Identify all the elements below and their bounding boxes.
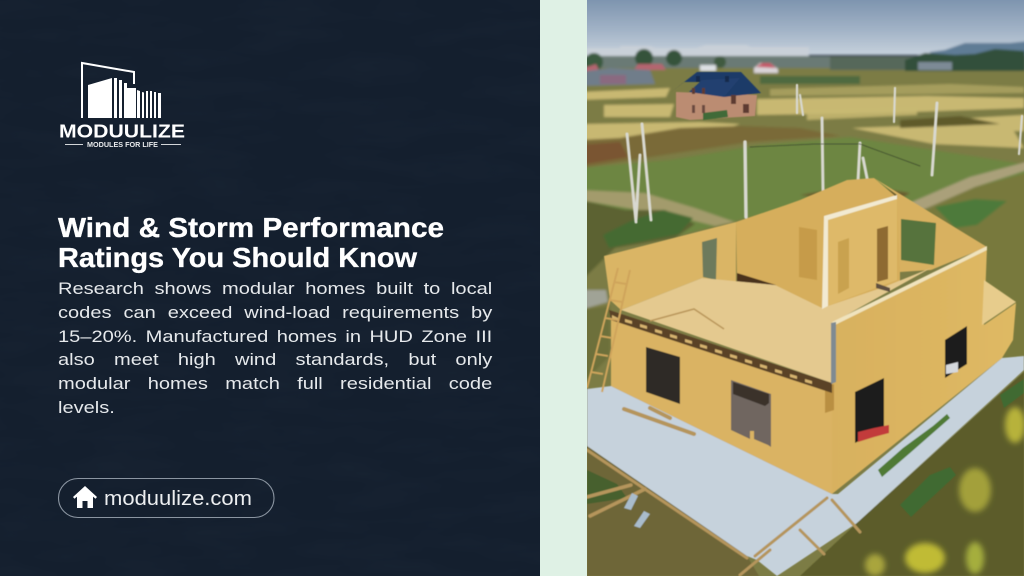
- left side shrubs: [580, 200, 695, 282]
- ladder: [587, 268, 630, 392]
- lower storey walls: [611, 247, 1016, 494]
- green foreground field: [580, 137, 1024, 235]
- field base: [580, 66, 1024, 576]
- concrete slab: [587, 356, 1024, 576]
- deck planks: [650, 309, 724, 329]
- panel: dark navy left panel: [0, 0, 540, 576]
- body text block: 15–20%. Manufactured homes in HUD Zone III: [58, 327, 492, 346]
- timber formwork and boards: [587, 408, 860, 575]
- tree line and village: [580, 49, 1024, 86]
- back wall opening: [799, 227, 817, 280]
- green weed strip along wall: [878, 414, 950, 477]
- joist band: [609, 310, 832, 393]
- logo: Moduulize: [59, 62, 185, 149]
- front right wall cap and corner: [831, 246, 987, 384]
- background landscape: [580, 0, 1024, 576]
- distant city and hill: [580, 41, 1024, 61]
- lower storey openings: [646, 347, 680, 404]
- ground bottom right: [800, 372, 1024, 576]
- first floor deck: [621, 268, 931, 383]
- stairwell opening: [737, 273, 776, 290]
- roof annex right: [982, 280, 1016, 325]
- icon: building frame and blocks: [82, 63, 161, 118]
- logo tagline: MODULES FOR LIFE: [87, 140, 158, 149]
- body text block: Research shows modular homes built to local: [58, 279, 492, 298]
- logo wordmark: MODUULIZE: [59, 120, 185, 142]
- window left wall: [702, 238, 717, 280]
- brick farmhouse: [670, 72, 761, 120]
- utility poles: [627, 85, 1022, 222]
- body text block: levels.: [58, 398, 115, 417]
- icon: home: [73, 486, 97, 508]
- sky: [580, 0, 1024, 55]
- panel: mint divider strip: [540, 0, 587, 576]
- website url: moduulize.com: [104, 487, 252, 510]
- body text block: modular homes match full residential code: [58, 374, 492, 393]
- photo: modular home under construction: [587, 0, 1024, 576]
- rust-coloured scrub: [580, 126, 840, 168]
- right side field: [925, 172, 1024, 372]
- upper storey inner walls: [604, 178, 987, 310]
- golden field strips: [580, 84, 1024, 148]
- dirt paths: [580, 190, 735, 226]
- ground debris: [624, 493, 650, 528]
- website pill button: [58, 478, 274, 518]
- body text block: also meet high wind standards, but only: [58, 350, 492, 369]
- ground bottom left: [587, 440, 759, 576]
- window right wall: [901, 219, 936, 265]
- body text block: codes can exceed wind-load requirements by: [58, 303, 492, 322]
- heading: Wind & Storm Performance: [58, 212, 444, 243]
- heading: [58, 212, 444, 274]
- body text block: [58, 279, 492, 417]
- heading: Ratings You Should Know: [58, 242, 418, 273]
- divider wall: [822, 195, 897, 309]
